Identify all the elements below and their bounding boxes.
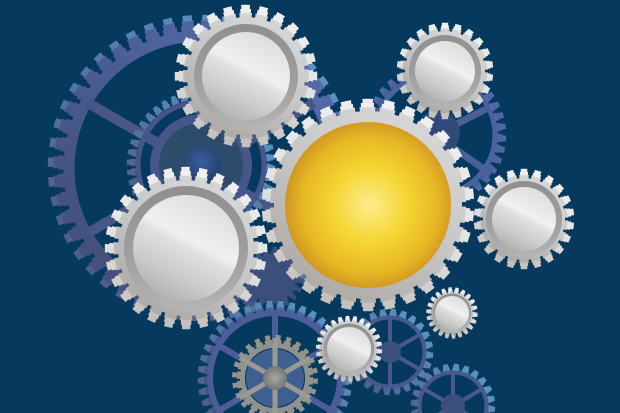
gold gear body (274, 111, 462, 299)
silver gear: top centre (172, 2, 320, 150)
silver gear: top right (396, 22, 494, 120)
bottom-left blue gear (200, 302, 350, 413)
right blue gear (366, 66, 504, 204)
mid blue gear with dark disc and hub (128, 92, 274, 238)
gold disc (285, 122, 451, 288)
large blue gear (51, 18, 351, 318)
inner tan gear (234, 338, 316, 413)
bottom-centre blue gear (348, 310, 432, 394)
silver gear: large left (102, 164, 270, 332)
silver gear: small lower right (427, 288, 477, 338)
silver gear: right (473, 168, 575, 270)
bottom-right blue gear (412, 365, 494, 413)
silver gear: small bottom centre (317, 317, 381, 381)
dark blue gear behind lower centre (243, 249, 301, 307)
gold gear teeth (260, 97, 476, 313)
main gold gear (260, 97, 476, 313)
